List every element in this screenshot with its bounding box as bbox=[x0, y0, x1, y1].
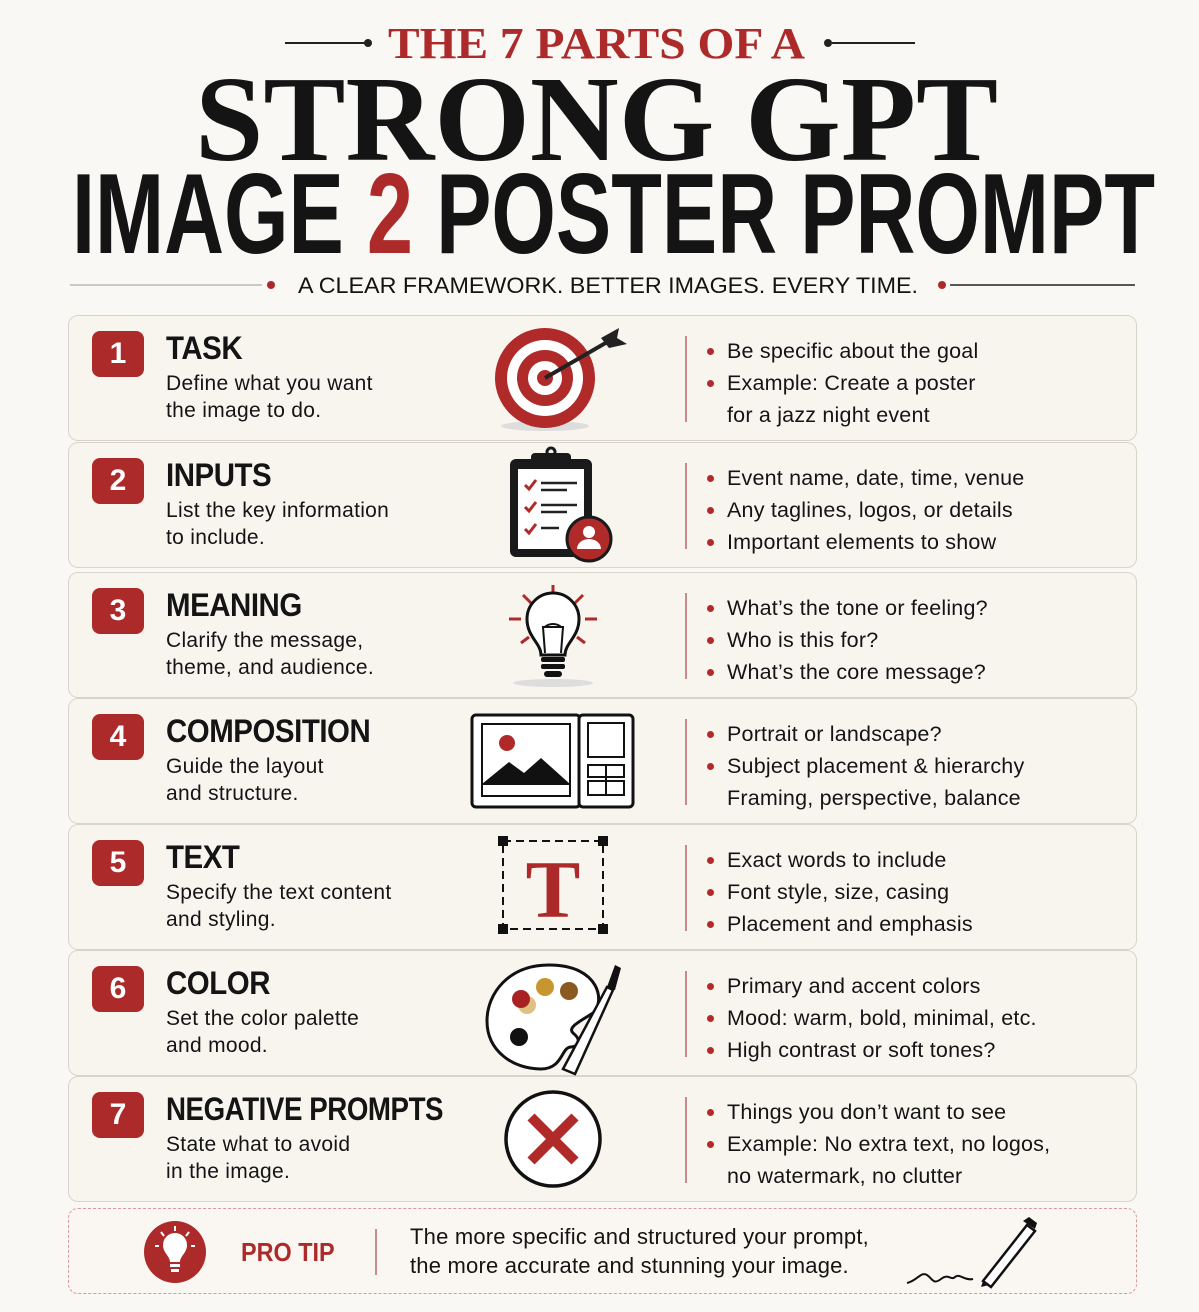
headline line 1: STRONG GPT bbox=[195, 52, 998, 187]
panel: color: and mood. bbox=[166, 1034, 268, 1057]
panel: inputs: List the key information bbox=[166, 499, 389, 522]
panel: text bbox=[68, 824, 1137, 950]
icon: pen bbox=[906, 1217, 1037, 1289]
panel: composition: COMPOSITION bbox=[166, 713, 370, 749]
panel: negative prompts: Example: No extra text, no logos, bbox=[727, 1132, 1050, 1156]
icon: lightbulb bbox=[509, 585, 597, 687]
panel: composition: and structure. bbox=[166, 782, 299, 805]
panel: meaning: theme, and audience. bbox=[166, 656, 374, 679]
panel: text: and styling. bbox=[166, 908, 276, 931]
panel: task: the image to do. bbox=[166, 399, 321, 422]
panel: negative prompts: in the image. bbox=[166, 1160, 290, 1183]
panel: task: Example: Create a poster bbox=[727, 371, 976, 395]
panel: inputs: 2 bbox=[110, 464, 126, 497]
panel: color: Primary and accent colors bbox=[727, 974, 981, 998]
panel: meaning bbox=[68, 572, 1137, 698]
icon: x circle bbox=[504, 1090, 602, 1188]
panel: color: 6 bbox=[110, 972, 126, 1005]
icon: target bbox=[495, 328, 627, 431]
icon: clipboard bbox=[510, 446, 612, 562]
panel: text: Specify the text content bbox=[166, 881, 392, 904]
panel: negative prompts: Things you don’t want to see bbox=[727, 1100, 1006, 1124]
panel: meaning: What’s the tone or feeling? bbox=[727, 596, 988, 620]
panel: composition: Portrait or landscape? bbox=[727, 722, 942, 746]
panel: task: Be specific about the goal bbox=[727, 339, 978, 363]
panel: inputs: Event name, date, time, venue bbox=[727, 466, 1024, 490]
kicker: THE 7 PARTS OF A bbox=[388, 19, 805, 68]
panel: inputs: Important elements to show bbox=[727, 530, 996, 554]
panel: color: COLOR bbox=[166, 965, 270, 1001]
panel: inputs bbox=[68, 442, 1137, 568]
tip text: the more accurate and stunning your image. bbox=[410, 1253, 849, 1278]
panel: pro tip bbox=[68, 1208, 1137, 1294]
panel: meaning: What’s the core message? bbox=[727, 660, 986, 684]
panel: color: High contrast or soft tones? bbox=[727, 1038, 996, 1062]
pro tip label: PRO TIP bbox=[241, 1237, 335, 1267]
panel: negative prompts: State what to avoid bbox=[166, 1133, 350, 1156]
panel: meaning: Who is this for? bbox=[727, 628, 878, 652]
subtitle: A CLEAR FRAMEWORK. BETTER IMAGES. EVERY TIME. bbox=[298, 273, 918, 298]
panel: composition: Framing, perspective, balance bbox=[727, 786, 1021, 810]
panel: text: Exact words to include bbox=[727, 848, 947, 872]
panel: meaning: 3 bbox=[110, 594, 126, 627]
panel: composition: Guide the layout bbox=[166, 755, 324, 778]
panel: negative prompts: 7 bbox=[110, 1098, 126, 1131]
title bbox=[70, 19, 1155, 298]
icon: text box: T bbox=[526, 844, 580, 935]
panel: meaning: Clarify the message, bbox=[166, 629, 363, 652]
panel: text: Font style, size, casing bbox=[727, 880, 949, 904]
icon: bulb circle bbox=[144, 1221, 206, 1283]
panel: composition: Subject placement & hierarchy bbox=[727, 754, 1024, 778]
panel: task: Define what you want bbox=[166, 372, 373, 395]
panel: negative prompts bbox=[68, 1076, 1137, 1202]
panel: negative prompts: no watermark, no clutter bbox=[727, 1164, 962, 1188]
panel: task bbox=[68, 315, 1137, 441]
icon: layout bbox=[470, 714, 634, 808]
panel: negative prompts: NEGATIVE PROMPTS bbox=[166, 1091, 443, 1127]
icon: text box bbox=[498, 836, 608, 935]
panel: task: for a jazz night event bbox=[727, 403, 930, 427]
panel: color bbox=[68, 950, 1137, 1076]
panel: inputs: INPUTS bbox=[166, 457, 271, 493]
panel: meaning: MEANING bbox=[166, 587, 302, 623]
panel: composition bbox=[68, 698, 1137, 824]
panel: text: Placement and emphasis bbox=[727, 912, 973, 936]
panel: task: 1 bbox=[110, 337, 126, 370]
panel: color: Set the color palette bbox=[166, 1007, 359, 1030]
panel: task: TASK bbox=[166, 330, 242, 366]
panel: text: TEXT bbox=[166, 839, 239, 875]
panel: inputs: to include. bbox=[166, 526, 265, 549]
panel: inputs: Any taglines, logos, or details bbox=[727, 498, 1013, 522]
panel: text: 5 bbox=[110, 846, 126, 879]
panel: color: Mood: warm, bold, minimal, etc. bbox=[727, 1006, 1037, 1030]
tip text bbox=[410, 1224, 869, 1278]
icon: palette bbox=[486, 964, 621, 1076]
panel: composition: 4 bbox=[110, 720, 126, 753]
tip text: The more specific and structured your prompt, bbox=[410, 1224, 869, 1249]
